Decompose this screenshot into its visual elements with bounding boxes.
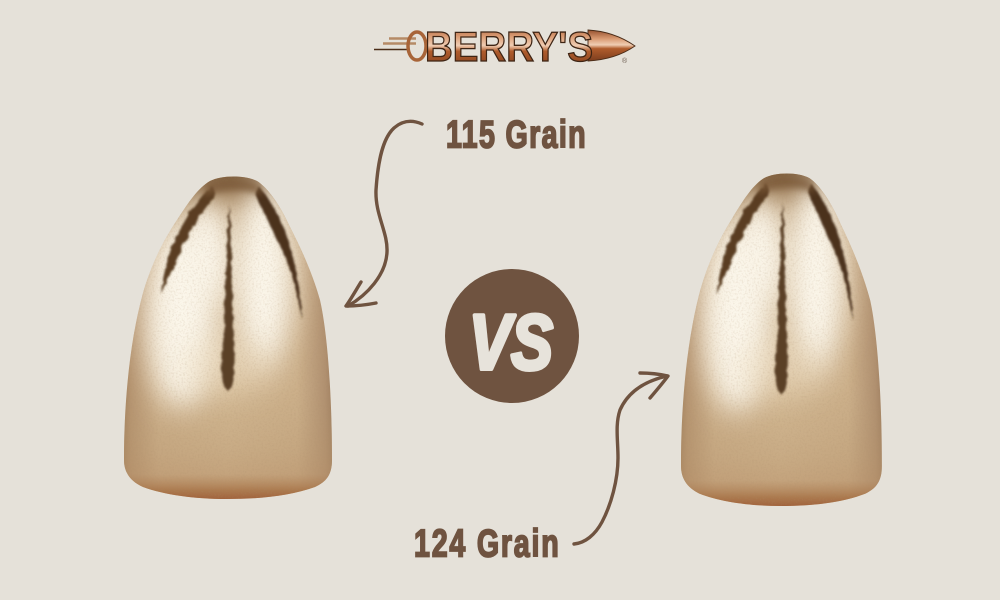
logo ring: [408, 32, 426, 60]
logo speed lines: [374, 38, 416, 50]
logo: Berry's: [374, 23, 635, 70]
arrow: 115 Grain to left bullet: [346, 121, 422, 306]
badge text: VS: [469, 298, 553, 386]
bullet: 115 grain: [120, 170, 336, 505]
label: 115 Grain: 115 Grain: [446, 113, 587, 157]
VS badge: [445, 269, 579, 403]
arrow: 124 Grain to right bullet: [574, 373, 668, 544]
label: 124 Grain: 124 Grain: [414, 522, 561, 566]
logo wordmark: BERRY'S: [425, 23, 593, 70]
bullet: 124 grain: [677, 167, 886, 512]
logo bullet nose: [588, 30, 635, 61]
badge circle: [445, 269, 579, 403]
logo registered mark: ®: [622, 57, 628, 65]
